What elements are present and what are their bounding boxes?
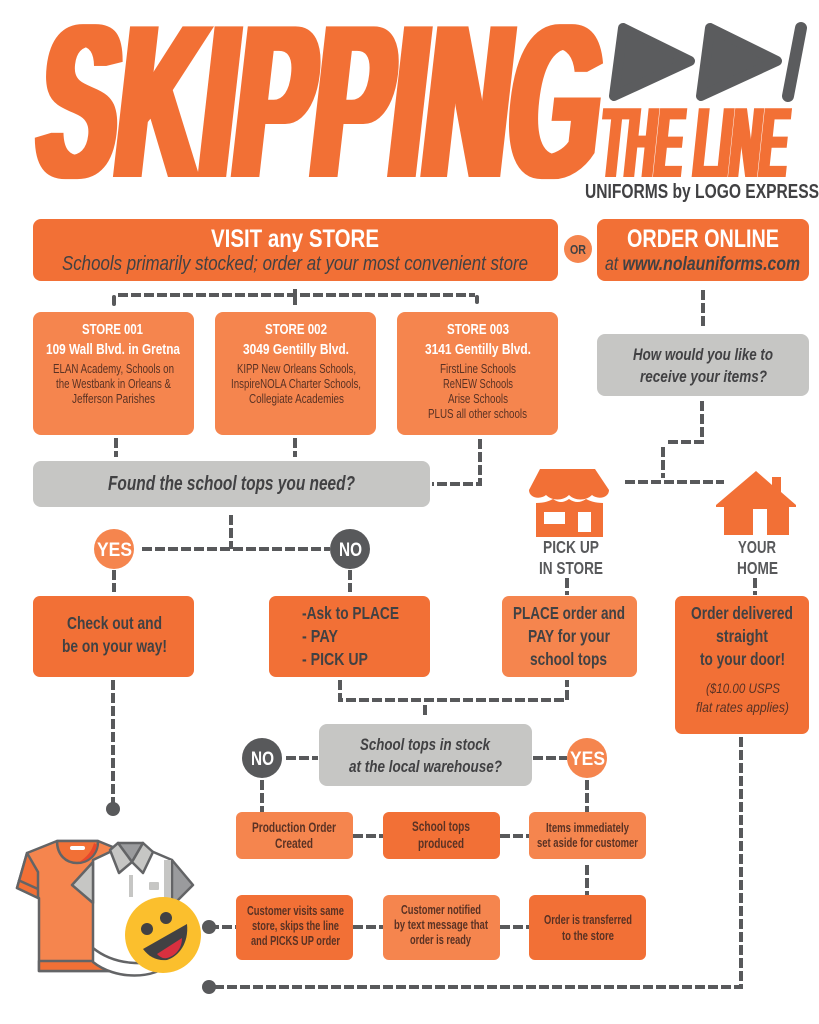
step: items set aside (529, 812, 646, 859)
panel: check out: Check out and (67, 613, 162, 633)
panel: ask to place: - PICK UP (302, 649, 368, 669)
step: customer notified: order is ready (410, 933, 471, 947)
panel: order delivered: ($10.00 USPS (706, 680, 781, 696)
question: found the school tops: Found the school tops you need? (108, 473, 355, 495)
step: items set aside: Items immediately (546, 821, 629, 835)
icon: orange t-shirt (17, 841, 125, 971)
badge: no: NO (339, 540, 362, 561)
illustration: shirts and smiley (17, 841, 201, 976)
step: customer visits store: store, skips the line (252, 919, 339, 933)
question: how to receive (597, 334, 809, 396)
panel: store 001: ELAN Academy, Schools on (53, 361, 174, 376)
panel: store 002: InspireNOLA Charter Schools, (231, 376, 361, 391)
panel: store 001: Jefferson Parishes (72, 391, 155, 406)
panel: store 003: PLUS all other schools (428, 406, 527, 421)
question: how to receive: How would you like to (633, 345, 773, 364)
icon: white polo shirt (72, 843, 193, 976)
question: warehouse stock (319, 724, 532, 786)
panel: store 003: ReNEW Schools (443, 376, 513, 391)
panel: store 001 (33, 312, 194, 435)
step: production order created: Created (275, 836, 313, 851)
badge: yes (94, 529, 134, 569)
step: school tops produced: produced (418, 836, 464, 851)
panel: place order: school tops (530, 649, 607, 669)
panel: order delivered: straight (716, 626, 768, 646)
question: warehouse stock: at the local warehouse? (349, 757, 502, 776)
step: customer visits store (236, 895, 353, 960)
panel: store 003 (397, 312, 558, 435)
icon: smiley (125, 897, 201, 973)
badge: warehouse no: NO (251, 749, 274, 770)
badge: or (564, 235, 592, 263)
panel: store 002: Collegiate Academies (249, 391, 344, 406)
panel: store 001: STORE 001 (82, 322, 143, 338)
label: pick up in store: IN STORE (539, 558, 603, 578)
badge: yes: YES (97, 540, 132, 561)
step: order transferred: Order is transferred (544, 913, 632, 927)
badge: or: OR (570, 242, 587, 257)
panel: store 002: KIPP New Orleans Schools, (237, 361, 356, 376)
panel: visit any store (33, 219, 558, 281)
label: pick up in store (539, 537, 603, 578)
step: customer notified (383, 895, 500, 960)
step: customer visits store: Customer visits same (247, 904, 344, 918)
panel: order online: ORDER ONLINE (627, 225, 779, 253)
label: your home (737, 537, 778, 578)
panel: check out: be on your way! (62, 636, 167, 656)
question: warehouse stock: School tops in stock (360, 735, 491, 754)
icon: store (529, 469, 609, 537)
step: customer notified: by text message that (394, 918, 489, 932)
badge: warehouse yes: YES (570, 749, 605, 770)
panel: store 003: 3141 Gentilly Blvd. (425, 341, 531, 358)
panel: store 003: FirstLine Schools (440, 361, 516, 376)
step: customer notified: Customer notified (401, 903, 481, 917)
panel: store 001: the Westbank in Orleans & (56, 376, 171, 391)
panel: visit any store: VISIT any STORE (211, 225, 379, 253)
label: your home: HOME (737, 558, 778, 578)
icon: fast forward symbol (614, 28, 801, 96)
panel: check out (33, 596, 194, 677)
step: customer visits store: and PICKS UP order (251, 934, 340, 948)
panel: place order: PAY for your (528, 626, 610, 646)
step: production order created (236, 812, 353, 859)
badge: warehouse yes (567, 738, 607, 778)
step: order transferred (529, 895, 646, 960)
label: your home: YOUR (738, 537, 776, 557)
panel: store 001: 109 Wall Blvd. in Gretna (46, 341, 181, 358)
badge: no (330, 529, 370, 569)
step: items set aside: set aside for customer (537, 836, 638, 850)
panel: ask to place: -Ask to PLACE (302, 603, 399, 623)
panel: store 002: 3049 Gentilly Blvd. (243, 341, 349, 358)
panel: order online (597, 219, 809, 281)
step: production order created: Production Order (252, 820, 337, 835)
label: pick up in store: PICK UP (543, 537, 599, 557)
panel: ask to place: - PAY (302, 626, 338, 646)
panel: store 003: STORE 003 (447, 322, 509, 338)
question: how to receive: receive your items? (640, 367, 767, 386)
question: found the school tops (33, 461, 430, 507)
panel: order delivered: Order delivered (691, 603, 793, 623)
panel: place order (502, 596, 637, 677)
panel: place order: PLACE order and (513, 603, 625, 623)
panel: store 002 (215, 312, 376, 435)
title: The Line: THE LINE (596, 87, 794, 199)
connectors (106, 289, 755, 994)
step: school tops produced: School tops (412, 819, 470, 834)
panel: store 003: Arise Schools (448, 391, 508, 406)
panel: ask to place (269, 596, 430, 677)
step: school tops produced (383, 812, 500, 859)
icon: house (716, 471, 796, 535)
panel: store 002: STORE 002 (265, 322, 327, 338)
badge: warehouse no (242, 738, 282, 778)
step: order transferred: to the store (562, 929, 614, 943)
panel: order delivered (675, 596, 809, 734)
panel: order delivered: flat rates applies) (696, 699, 789, 715)
panel: visit any store: Schools primarily stocked; order at your most convenient store (62, 253, 528, 275)
panel: order delivered: to your door! (700, 649, 785, 669)
